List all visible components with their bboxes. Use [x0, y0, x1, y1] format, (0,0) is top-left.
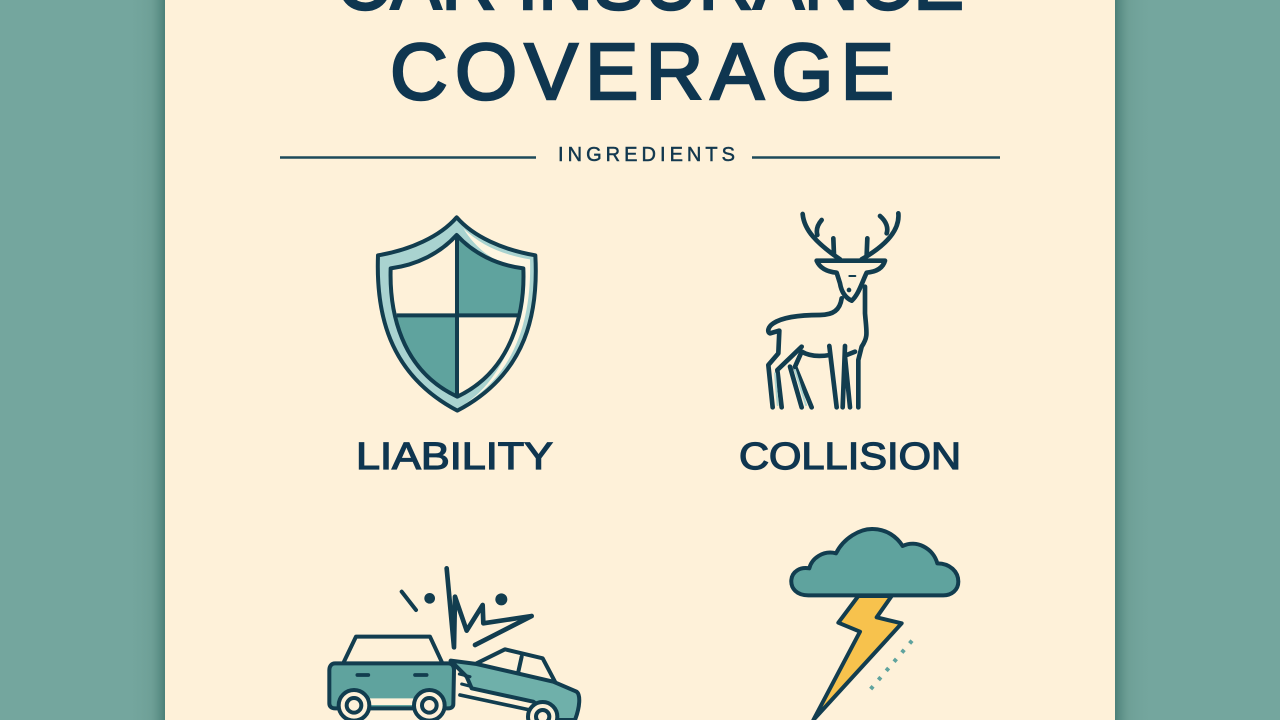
title: COVERAGE: [390, 27, 894, 116]
icon: car crash: [329, 568, 579, 720]
impact burst: [402, 568, 532, 647]
icon: storm cloud and lightning: [791, 529, 958, 720]
subtitle: ingredients: INGREDIENTS: [558, 144, 735, 166]
title: [336, 0, 964, 116]
rain dashes: [869, 641, 912, 691]
lightning bolt: [813, 596, 902, 720]
icon: deer: [768, 213, 898, 407]
cloud: [791, 529, 958, 595]
panel: poster: [165, 0, 1115, 720]
icon: shield: [378, 217, 536, 411]
left car: [329, 637, 454, 720]
label: liability: LIABILITY: [356, 436, 553, 478]
label: collision: COLLISION: [739, 436, 961, 478]
right car: [451, 649, 579, 720]
